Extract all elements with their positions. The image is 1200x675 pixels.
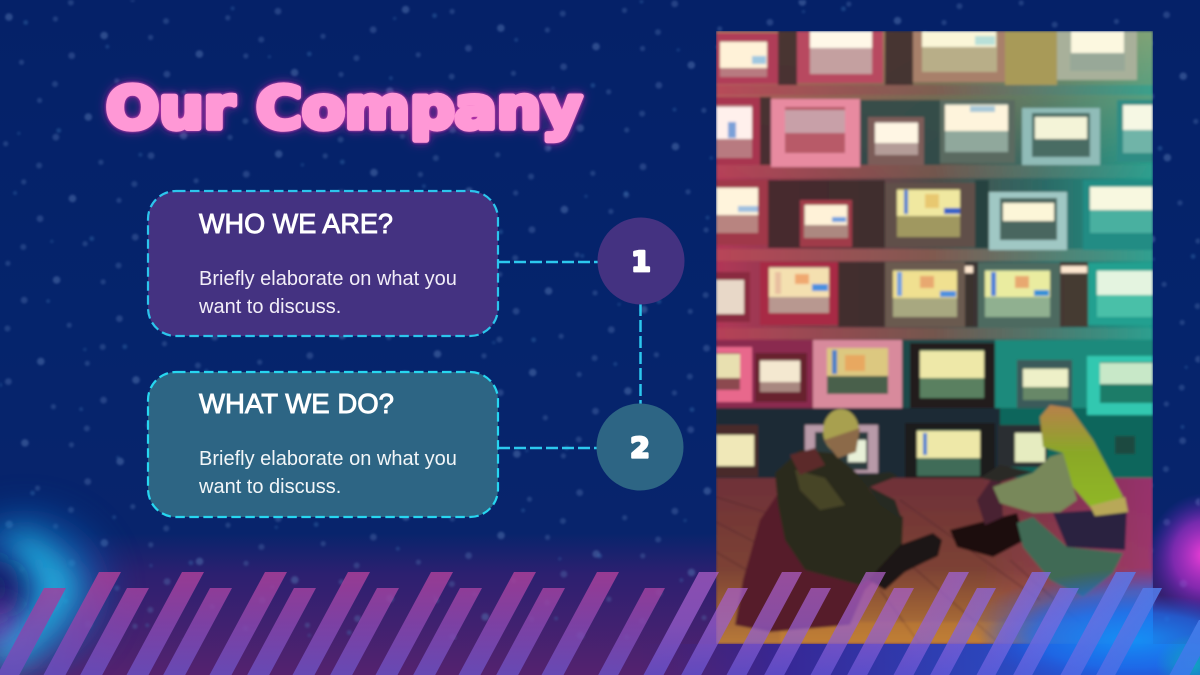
dark gaps (760, 31, 1088, 327)
right corner neon glow (980, 493, 1200, 675)
text: what we do description: want to discuss. (198, 476, 341, 498)
title: Our Company (106, 74, 582, 142)
diagonal stripes: over photo (644, 572, 1200, 675)
TV row 2 (716, 97, 1153, 167)
heading: who we are: WHO WE ARE? (199, 208, 393, 239)
number badge 1 (598, 218, 684, 304)
photo colour wash (976, 570, 1153, 644)
text: who we are description: Briefly elaborate on what you (199, 268, 457, 290)
heading: what we do: WHAT WE DO? (199, 388, 394, 419)
TV row 3 (716, 180, 1153, 250)
text: who we are description: want to discuss. (198, 296, 341, 318)
glow: left neon swirl (0, 510, 110, 670)
TV row 1 (716, 31, 1137, 84)
text: what we do description: Briefly elaborate on what you (199, 448, 457, 470)
TV row 6 (716, 422, 1136, 478)
person: woman (950, 405, 1128, 597)
TV row 4 (716, 262, 1153, 328)
TV row 5 (716, 340, 1153, 415)
number badge 2: 2 (630, 431, 650, 464)
lower dark wall (716, 406, 1002, 480)
number badge 2 (596, 404, 684, 490)
diagonal stripes: background side (0, 572, 665, 675)
wooden floor (716, 478, 1153, 644)
connector lines (498, 262, 640, 448)
number badge 1: 1 (631, 245, 651, 278)
photo: gamers facing a wall of TVs (716, 31, 1153, 644)
person: man (735, 409, 942, 632)
card: what we do (148, 372, 498, 517)
shelves (716, 85, 1153, 339)
card: who we are (148, 191, 498, 336)
